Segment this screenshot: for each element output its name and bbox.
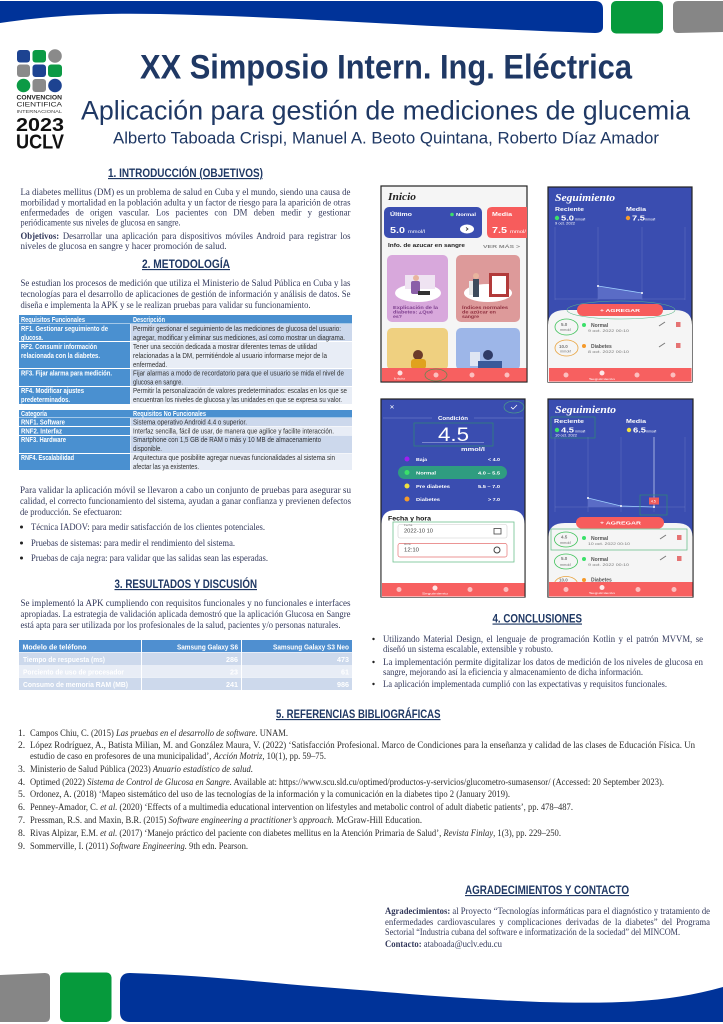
table: requisitos funcionales: agregar, modificar y eliminar sus mediciones, así como mostrar un diagrama. — [133, 333, 345, 342]
table: requisitos no funcionales: afectar las ya existentes. — [133, 462, 199, 471]
table: requisitos no funcionales: RNF3. Hardware — [21, 435, 66, 444]
table: requisitos funcionales: Permitir gestionar el seguimiento de las mediciones de glucosa del usuario: — [133, 324, 341, 333]
table: requisitos funcionales: Requisitos Funcionales — [21, 315, 85, 324]
app screenshot: Seguimiento con nueva medición: mmol/l — [575, 430, 586, 434]
text block: agradecimientos y contacto — [385, 906, 711, 950]
table: requisitos funcionales: Descripción — [133, 315, 165, 324]
table: resultados por modelo de teléfono — [19, 640, 352, 690]
list: referencias bibliográficas: Optimed (2022) Sistema de Control de Glucosa en Sangre. Available at: https://www.scu.sld.cu/optimed/productos-y-servicios/glucometro-sumasensor/ (Accessed: 20 September 2023). — [30, 777, 664, 788]
heading: introducción: 1. INTRODUCCIÓN (OBJETIVOS) — [108, 167, 263, 180]
app screenshot: Condición: 2022-10 10 — [404, 528, 433, 534]
table: requisitos funcionales — [19, 315, 352, 404]
text block: introducción: periódicamente sus niveles de glucosa en sangre. — [20, 218, 180, 228]
app screenshot: Inicio: mmol/l — [408, 229, 425, 234]
table: resultados por modelo de teléfono: 61 — [341, 668, 350, 676]
app screenshot: Inicio — [381, 186, 527, 382]
app screenshot: Condición: > 7.0 — [488, 497, 501, 502]
app screenshot: Seguimiento con nueva medición: Media — [626, 419, 647, 425]
app screenshot: Seguimiento con nueva medición: Normal — [591, 557, 609, 563]
app screenshot: Seguimiento: mmol/l — [645, 218, 656, 222]
app screenshot: Inicio: diabetes: ¿Qué — [393, 310, 434, 314]
text block: validación — [20, 485, 351, 518]
app screenshot: Condición: Fecha — [404, 523, 413, 527]
app screenshot: Seguimiento: mmol/l — [560, 328, 571, 332]
text block: resultados: Se implementó la APK cumpliendo con requisitos funcionales y no funcionales e interfaces — [20, 598, 351, 609]
text block: introducción: La diabetes mellitus (DM) es un problema de salud en Cuba y el mundo, siendo una causa de — [20, 187, 351, 198]
authors: Alberto Taboada Crispi, Manuel A. Beoto Quintana, Roberto Díaz Amador — [113, 130, 660, 148]
app screenshot: Inicio: Info. de azucar en sangre — [388, 243, 465, 249]
app screenshot: Seguimiento con nueva medición: 4.5 — [561, 534, 568, 540]
header band — [0, 1, 723, 34]
app screenshot: Condición: Seguimiento — [422, 592, 449, 596]
table: requisitos no funcionales: disponible. — [133, 444, 162, 453]
text block: metodología: tecnologías para el desarrollo de aplicaciones de gestión de información y análisis de datos. Se — [20, 289, 351, 300]
table: resultados por modelo de teléfono: Porciento de uso de procesador — [23, 668, 124, 676]
text block: resultados: apropiadas. La estrategia de validación aplicada demostró que la aplicación Glucosa en Sangre — [20, 609, 351, 620]
table: resultados por modelo de teléfono: Modelo de teléfono — [22, 642, 87, 652]
list: referencias bibliográficas: Ordonez, A. (2018) ‘Mapeo sistemático del uso de las tecnologías de la información y la comunicación en la diabetes tipo 2 (January 2019). — [30, 789, 510, 800]
app screenshot: Condición: 12:10 — [404, 548, 419, 554]
app screenshot: Condición — [381, 399, 525, 597]
text block: introducción: morbilidad y mortalidad en la población adulta y un factor de riesgo para la aparición de otras — [20, 198, 351, 208]
text block: metodología: Se estudian los procesos de medición que utiliza el Ministerio de Salud Pública en Cuba y las — [20, 278, 351, 289]
heading: agradecimientos y contacto: AGRADECIMIENTOS Y CONTACTO — [465, 885, 629, 897]
text block: metodología — [20, 278, 351, 311]
list: pruebas: Técnica IADOV: para medir satisfacción de los clientes potenciales. — [31, 522, 265, 533]
table: requisitos no funcionales: RNF2. Interfaz — [21, 426, 62, 436]
app screenshot: Seguimiento con nueva medición: Reciente — [554, 419, 584, 425]
app screenshot: Seguimiento con nueva medición: mmol/l — [560, 563, 571, 567]
footer band — [0, 972, 723, 1022]
text block: introducción: enfermedades de origen vascular. Los pacientes con DM deben medir y gestionar — [20, 208, 351, 218]
app screenshot: Condición: Condición — [438, 416, 469, 422]
table: resultados por modelo de teléfono: 286 — [226, 655, 238, 664]
app screenshot: Seguimiento: mmol/l — [560, 350, 571, 354]
app screenshot: Condición: mmol/l — [461, 447, 486, 453]
text block: introducción: niveles de glucosa en sangre y hacer promoción de salud. — [20, 241, 226, 252]
list: referencias bibliográficas: Pressman, R.S. and Maxin, B.R. (2015) Software engineering a practitioner’s approach. McGraw-Hill Education. — [30, 815, 422, 826]
list: referencias bibliográficas: 5. — [18, 789, 25, 800]
table: requisitos no funcionales: Interfaz sencilla, fácil de usar, de manera que agilice y facilite interacción. — [133, 426, 334, 436]
table: requisitos funcionales: encuentran los niveles de glucosa y las unidades en que se expresa su valor. — [133, 395, 342, 404]
app screenshot: Inicio: 7.5 — [492, 226, 508, 235]
app screenshot: Inicio: sangre — [462, 314, 480, 319]
app screenshot: Inicio: Último — [390, 211, 412, 218]
table: requisitos funcionales: glucosa. — [21, 333, 43, 342]
app screenshot: Seguimiento — [548, 187, 692, 382]
app screenshot: Condición: ✕ — [390, 405, 395, 411]
app screenshot: Inicio: de azúcar en — [462, 310, 496, 314]
list: conclusiones: sangre, mejorando así la eficiencia y almacenamiento de dicha información. — [383, 667, 643, 678]
app screenshot: Seguimiento con nueva medición: Diabetes — [591, 578, 612, 584]
app screenshot: Inicio: Normal — [456, 212, 476, 217]
app screenshot: Condición: Baja — [416, 457, 428, 462]
app screenshot: Inicio: 5.0 — [390, 226, 406, 235]
table: requisitos no funcionales: Sistema operativo Android 4.4 o superior. — [133, 418, 247, 426]
app screenshot: Seguimiento: + AGREGAR — [600, 308, 641, 314]
list: referencias bibliográficas: Penney-Amador, C. et al. (2020) ‘Effects of a multimedia educational intervention on lifestyles and metabolic control of adult diabetic patients’, pp. 478–487. — [30, 802, 573, 813]
app screenshot: Inicio: VER MÁS > — [483, 244, 521, 249]
table: resultados por modelo de teléfono: 473 — [337, 655, 349, 664]
table: resultados por modelo de teléfono: 241 — [226, 680, 239, 689]
logo: Convención Científica Internacional 2023 UCLV: CONVENCION — [16, 94, 63, 102]
app screenshot: Seguimiento con nueva medición: + AGREGAR — [600, 520, 642, 526]
text block: metodología: diseña e implementa la APK y se le realizan pruebas para validar su funcionamiento. — [20, 300, 310, 311]
app screenshot: Seguimiento: Media — [626, 207, 647, 213]
app screenshot: Seguimiento con nueva medición: Normal — [591, 536, 609, 542]
app screenshot: Condición: Diabetes — [416, 497, 441, 502]
text block: resultados: está apta para ser utilizada por los profesionales de la salud, pacientes y/o personas naturales. — [20, 620, 340, 631]
heading: metodología: 2. METODOLOGÍA — [142, 258, 230, 271]
table: requisitos funcionales: enfermedad. — [133, 360, 167, 369]
list: pruebas — [20, 522, 268, 564]
list: referencias bibliográficas: 1. — [18, 728, 25, 739]
heading: referencias: 5. REFERENCIAS BIBLIOGRÁFICAS — [276, 708, 441, 721]
list: referencias bibliográficas: 6. — [18, 802, 25, 813]
heading: conclusiones: 4. CONCLUSIONES — [492, 614, 582, 626]
app screenshot: Seguimiento: 5.0 — [561, 216, 574, 222]
app screenshot: Seguimiento con nueva medición: 4.5 — [651, 500, 656, 504]
list: referencias bibliográficas: Campos Chiu, C. (2015) Las pruebas en el desarrollo de software. UNAM. — [30, 728, 288, 739]
app screenshot: Inicio: Media — [492, 212, 512, 218]
list: referencias bibliográficas: Rivas Alpizar, E.M. et al. (2017) ‘Manejo práctico del paciente con diabetes mellitus en la Atención Primaria de Salud’, Revista Finlay, 1(3), pp. 229–250. — [30, 828, 561, 839]
app screenshot: Seguimiento con nueva medición: 4.5 — [561, 428, 574, 434]
table: requisitos funcionales: RF1. Gestionar seguimiento de — [21, 324, 108, 333]
table: resultados por modelo de teléfono: Consumo de memoria RAM (MB) — [23, 680, 128, 689]
app screenshot: Inicio: es? — [393, 314, 402, 319]
app screenshot: Seguimiento: 5.0 — [561, 322, 568, 327]
list: referencias bibliográficas: 3. — [18, 764, 25, 775]
list: conclusiones: La aplicación implementada cumplió con las expectativas y requisitos funcionales. — [383, 679, 667, 690]
app screenshot: Condición: Fecha y hora — [388, 516, 432, 522]
app screenshot: Seguimiento: Reciente — [555, 207, 584, 213]
list: conclusiones: diseñó un sistema escalable, extensible y robusto. — [383, 644, 553, 655]
text block: validación: Para validar la aplicación móvil se llevaron a cabo un conjunto de pruebas para asegurar su — [20, 485, 351, 496]
app screenshot: Condición: 4.5 — [438, 425, 469, 446]
app screenshot: Seguimiento con nueva medición: 6.5 — [633, 428, 646, 434]
text block: agradecimientos y contacto: Contacto: ataboada@uclv.edu.cu — [385, 939, 502, 950]
table: requisitos no funcionales: RNF1. Software — [21, 418, 65, 426]
list: conclusiones: La implementación permite digitalizar los datos de medición de los niveles de glucosa en — [383, 657, 703, 668]
table: requisitos no funcionales: RNF4. Escalabilidad — [21, 453, 74, 462]
heading: resultados: 3. RESULTADOS Y DISCUSIÓN — [114, 578, 257, 591]
app screenshot: Seguimiento con nueva medición: 10.0 — [559, 578, 568, 582]
table: requisitos funcionales: Permitir la personalización de valores predeterminados: escalas en los que se — [133, 386, 347, 395]
table: requisitos no funcionales: Categoría — [21, 409, 48, 418]
table: resultados por modelo de teléfono: Tiempo de respuesta (ms) — [23, 655, 105, 664]
table: requisitos funcionales: predeterminados. — [21, 395, 70, 404]
list: referencias bibliográficas: Ministerio de Salud Pública (2023) Anuario estadístico de salud. — [30, 764, 253, 775]
table: requisitos funcionales: Fijar alarmas a modo de recordatorio para que el usuario se mida el nivel de — [133, 368, 344, 378]
table: requisitos funcionales: RF2. Consumir información — [21, 342, 97, 351]
app screenshot: Seguimiento con nueva medición: mmol/l — [560, 541, 571, 545]
app screenshot: Seguimiento: Diabetes — [591, 344, 612, 350]
table: requisitos no funcionales — [19, 409, 352, 471]
app screenshot: Condición: Normal — [416, 470, 436, 476]
text block: validación: calidad, el correcto funcionamiento del sistema, ayudan a ganar confianza y previenen defectos — [20, 496, 351, 507]
app screenshot: Seguimiento con nueva medición: 10 oct. 2022 00:10 — [588, 542, 630, 546]
app screenshot: Seguimiento con nueva medición: Seguimiento — [589, 591, 616, 595]
list: referencias bibliográficas: 8. — [18, 828, 25, 839]
app screenshot: Seguimiento: 9 oct. 2022 — [555, 222, 575, 226]
table: requisitos funcionales: relacionada con la diabetes. — [21, 351, 100, 360]
table: requisitos funcionales: relacionadas a la DM, permitiéndole al usuario informarse mejor de la — [133, 351, 328, 360]
table: requisitos funcionales: glucosa en sangre. — [133, 378, 183, 386]
app screenshot: Seguimiento: 10.0 — [559, 344, 568, 349]
title: XX Simposio Intern. Ing. Eléctrica — [140, 48, 633, 86]
app screenshot: Seguimiento: 8 oct. 2022 00:10 — [588, 350, 629, 354]
app screenshot: Seguimiento con nueva medición: mmol/l — [646, 430, 657, 434]
app screenshot: Inicio: Inicio — [387, 191, 417, 203]
list: referencias bibliográficas: Sommerville, I. (2011) Software Engineering. 9th edn. Pearson. — [30, 841, 248, 852]
app screenshot: Inicio: Inicio — [394, 376, 406, 380]
text block: introducción — [20, 187, 351, 252]
list: referencias bibliográficas — [18, 728, 695, 852]
table: resultados por modelo de teléfono: 23 — [230, 668, 238, 676]
app screenshot: Inicio: Índices normales — [462, 305, 509, 310]
list: referencias bibliográficas: 7. — [18, 815, 25, 826]
app screenshot: Condición: 4.0 – 5.5 — [478, 470, 501, 476]
app screenshot: Condición: Pre diabetes — [416, 484, 451, 489]
app screenshot: Seguimiento con nueva medición — [548, 399, 693, 597]
app screenshot: Seguimiento con nueva medición: 5.0 — [561, 556, 568, 561]
table: requisitos no funcionales: Requisitos No Funcionales — [133, 409, 206, 418]
app screenshot: Seguimiento: Seguimiento — [555, 192, 616, 204]
app screenshot: Condición: < 4.0 — [488, 457, 501, 462]
list: conclusiones — [372, 634, 704, 690]
table: requisitos no funcionales: Smartphone con 1,5 GB de RAM o más y 10 MB de almacenamiento — [133, 435, 321, 444]
text block: resultados — [20, 598, 351, 631]
list: referencias bibliográficas: 2. — [18, 740, 25, 751]
table: requisitos funcionales: RF3. Fijar alarma para medición. — [21, 368, 112, 378]
list: referencias bibliográficas: estudio de caso en profesores de una municipalidad’, Acción Motriz, 10(1), pp. 59–75. — [30, 751, 326, 762]
app screenshot: Seguimiento con nueva medición: Seguimiento — [555, 404, 617, 416]
table: resultados por modelo de teléfono: 986 — [337, 680, 349, 689]
app screenshot: Seguimiento: Normal — [591, 323, 609, 329]
app screenshot: Seguimiento con nueva medición: 10 oct. 2022 — [555, 434, 577, 438]
logo: Convención Científica Internacional 2023 UCLV — [16, 49, 65, 154]
table: resultados por modelo de teléfono: Samsung Galaxy S3 Neo — [273, 642, 349, 652]
table: requisitos no funcionales: Arquitectura que posibilite agregar nuevas funcionalidades al sistema sin — [133, 453, 335, 462]
subtitle: Aplicación para gestión de mediciones de glucemia — [81, 96, 690, 126]
logo: Convención Científica Internacional 2023 UCLV: INTERNACIONAL — [16, 109, 62, 115]
table: resultados por modelo de teléfono: Samsung Galaxy S6 — [177, 642, 238, 652]
list: pruebas: Pruebas de sistemas: para medir el rendimiento del sistema. — [31, 538, 235, 549]
app screenshot: Seguimiento: mmol/l — [575, 218, 586, 222]
logo: Convención Científica Internacional 2023 UCLV: CIENTIFICA — [16, 102, 63, 108]
list: pruebas: Pruebas de caja negra: para validar que las salidas sean las esperadas. — [31, 553, 268, 564]
table: requisitos funcionales: RF4. Modificar ajustes — [21, 386, 84, 395]
app screenshot: Condición: Hora — [404, 542, 411, 546]
app screenshot: Inicio: Explicación de la — [393, 305, 439, 310]
logo: Convención Científica Internacional 2023 UCLV: 2023 — [16, 115, 64, 135]
app screenshot: Seguimiento: Seguimiento — [589, 377, 616, 381]
app screenshot: Inicio: mmol/ — [510, 229, 527, 234]
list: referencias bibliográficas: 4. — [18, 777, 25, 788]
app screenshot: Seguimiento: 7.5 — [632, 216, 645, 222]
list: referencias bibliográficas: 9. — [18, 841, 25, 852]
app screenshot: Seguimiento con nueva medición: 9 oct. 2022 00:10 — [588, 563, 629, 567]
logo: Convención Científica Internacional 2023 UCLV: UCLV — [16, 132, 65, 154]
text block: validación: de producción. Se efectuaron: — [20, 507, 122, 518]
text block: introducción: Objetivos: Desarrollar una aplicación para dispositivos móviles Android para registrar los — [20, 231, 351, 242]
table: requisitos funcionales: Tener una sección dedicada a mostrar diferentes temas de utilidad — [133, 342, 317, 351]
app screenshot: Seguimiento: 9 oct. 2022 00:10 — [588, 329, 629, 333]
app screenshot: Condición: 5.5 – 7.0 — [478, 484, 501, 489]
